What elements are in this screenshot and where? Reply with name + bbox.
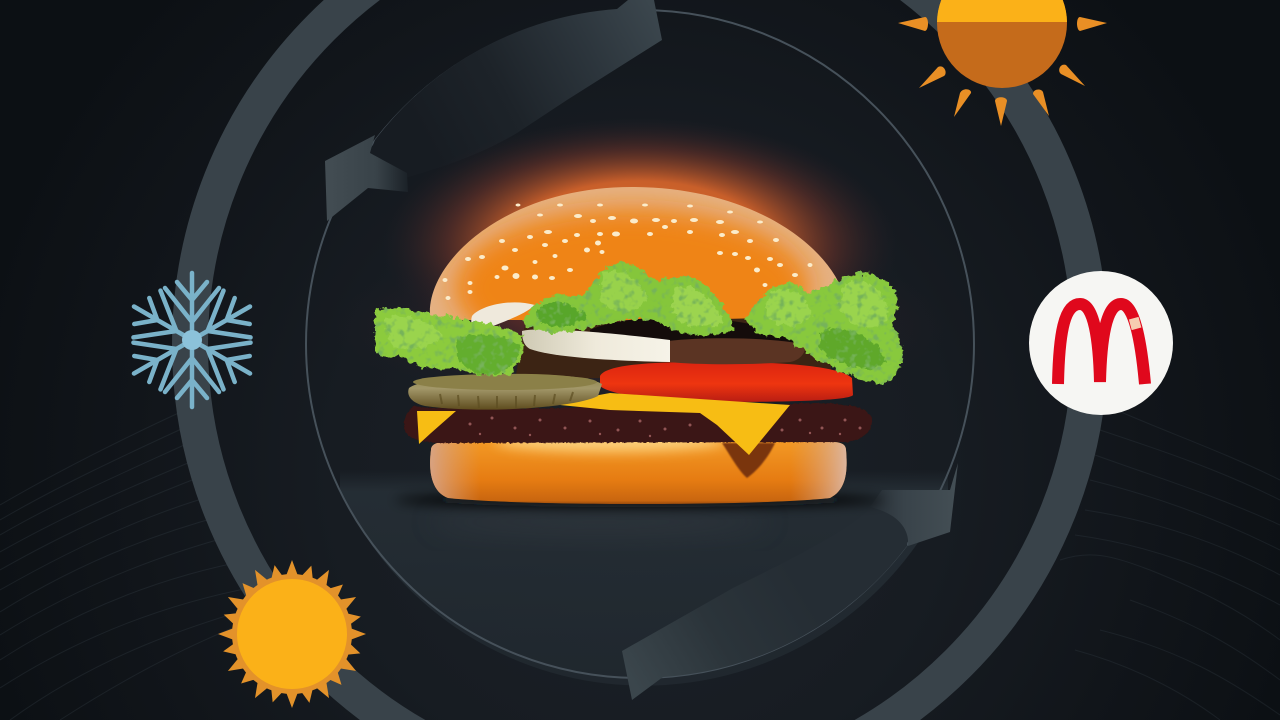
tomato [600,362,853,402]
sauce drip on the bun [722,443,775,478]
onion ring [522,329,670,362]
burger shadow [395,493,885,507]
icon: snowflake [120,273,264,407]
sesame seeds [442,204,812,300]
icon: sun, bottom left [218,560,366,708]
icon: logo badge [1029,271,1173,415]
wave texture: bottom right [1060,405,1280,720]
grilled onion slice [668,338,806,364]
top bun [430,187,838,320]
lettuce: left [375,308,524,376]
floor speckle [430,506,770,538]
dark gap under the bun [590,317,800,350]
beef patty [404,403,872,443]
lettuce: middle [522,262,732,335]
onion pieces [471,302,535,332]
burger [375,185,903,507]
icon: sun, top right [898,0,1107,126]
orbit: outer ring [190,0,1090,720]
brown filling behind the layers [515,316,840,380]
burger glow [330,117,950,410]
patty char specks [468,416,862,437]
arrow: upper inner curved arrow [325,0,662,221]
lettuce: right [746,274,903,383]
floor inside the inner ring [340,470,948,686]
orbit: inner thin ring [306,10,974,678]
cheese [417,393,790,455]
arrow: lower inner curved arrow [622,463,958,700]
pickle slice [408,374,602,410]
bottom bun [430,442,847,504]
wave texture: bottom left [0,410,280,720]
